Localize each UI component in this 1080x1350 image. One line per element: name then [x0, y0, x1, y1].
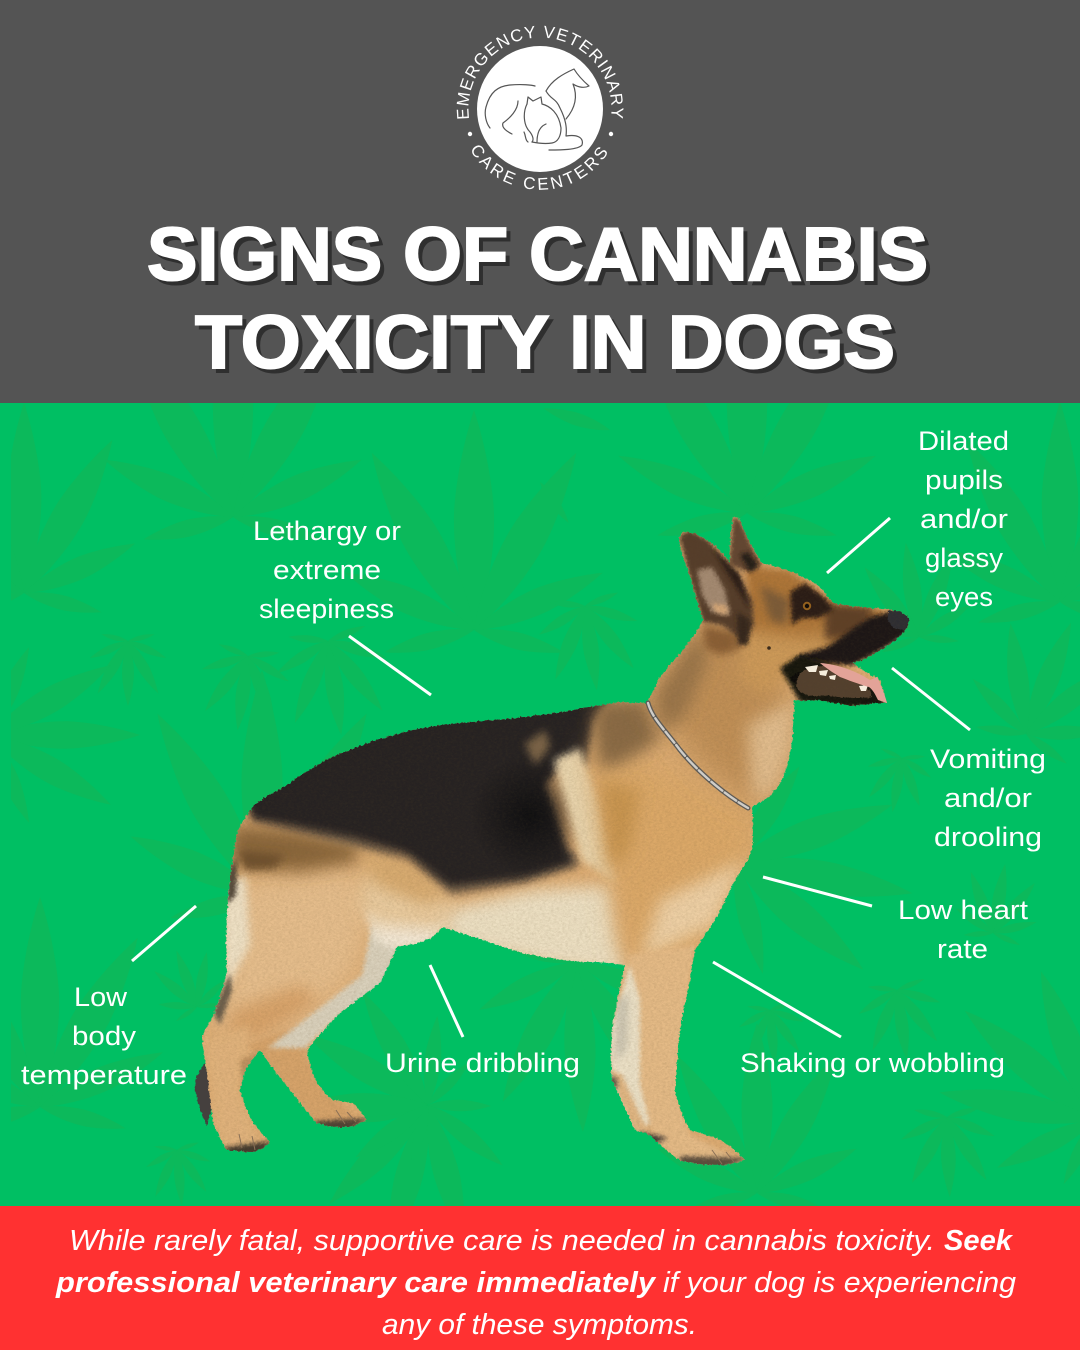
- ear left: [679, 530, 754, 642]
- title: [147, 212, 932, 388]
- head: [742, 564, 890, 667]
- pointer lines: [132, 518, 970, 1037]
- title text: [147, 212, 928, 384]
- footer text: Seek: [944, 1225, 1014, 1257]
- label: dilated pupils: and/or: [920, 504, 1008, 534]
- title text: SIGNS OF CANNABIS: [147, 212, 928, 296]
- label: dilated pupils: pupils: [925, 465, 1003, 495]
- label: urine: Urine dribbling: [385, 1048, 580, 1078]
- fur texture: [202, 546, 885, 1162]
- footer text: [55, 1225, 1016, 1341]
- label: dilated pupils: Dilated: [918, 426, 1009, 456]
- tongue: [820, 663, 887, 703]
- black saddle: [245, 692, 615, 886]
- logo: Emergency Veterinary Care Centers: EMERGENCY VETERINARY: [456, 26, 624, 119]
- body: [190, 510, 920, 1170]
- label: shaking: Shaking or wobbling: [740, 1048, 1005, 1078]
- transition under saddle: [250, 820, 580, 895]
- label: vomiting: and/or: [944, 783, 1032, 813]
- label: low heart rate: Low heart: [898, 895, 1029, 925]
- label: dilated pupils: glassy: [925, 543, 1004, 573]
- title shadow: SIGNS OF CANNABIS: [151, 216, 932, 300]
- paw toes: [239, 1110, 734, 1164]
- hind leg: [215, 865, 375, 1045]
- label: dilated pupils: eyes: [935, 582, 993, 612]
- footer text: if your dog is experiencing: [663, 1267, 1016, 1299]
- title shadow: [151, 216, 932, 388]
- line: pupils: [827, 518, 890, 573]
- green panel: [0, 403, 1080, 1206]
- header panel: [0, 0, 1080, 403]
- label: lethargy: [253, 516, 401, 624]
- label: low body temperature: [21, 982, 187, 1090]
- collar chain: [648, 703, 748, 808]
- mouth: [780, 655, 885, 708]
- label: lethargy: extreme: [273, 555, 381, 585]
- title shadow: TOXICITY IN DOGS: [199, 304, 899, 388]
- label: low body temperature: Low: [74, 982, 128, 1012]
- belly: [440, 885, 625, 975]
- label: lethargy: sleepiness: [259, 594, 394, 624]
- line: vomiting: [892, 668, 970, 730]
- eye patch: [790, 583, 833, 625]
- label: low heart rate: rate: [937, 934, 988, 964]
- rump band: [230, 825, 360, 872]
- footer text: professional veterinary care immediately: [55, 1267, 657, 1299]
- line: body temperature: [132, 906, 196, 961]
- dog illustration: [190, 510, 920, 1170]
- background cannabis leaves: [11, 403, 1080, 1206]
- title text: TOXICITY IN DOGS: [195, 300, 895, 384]
- label: low body temperature: temperature: [21, 1060, 187, 1090]
- label: low body temperature: body: [72, 1021, 137, 1051]
- paw shadows: [225, 1141, 272, 1157]
- footer text: While rarely fatal, supportive care is needed in cannabis toxicity.: [69, 1225, 935, 1257]
- line: shaking: [713, 962, 841, 1037]
- line: lethargy: [349, 636, 431, 695]
- neck: [650, 620, 790, 805]
- label: vomiting: drooling: [934, 822, 1042, 852]
- teeth: [805, 665, 868, 691]
- logo: Emergency Veterinary Care Centers: CARE CENTERS: [472, 145, 607, 190]
- line: heart rate: [763, 877, 872, 906]
- shoulder stripe and chest: [554, 748, 618, 885]
- footer text: any of these symptoms.: [382, 1309, 697, 1341]
- label: vomiting: [930, 744, 1046, 852]
- front leg: [628, 945, 745, 1170]
- eye: [803, 602, 811, 610]
- logo: Emergency Veterinary Care Centers: [456, 26, 624, 190]
- muzzle: [785, 610, 912, 672]
- footer panel: [0, 1206, 1080, 1350]
- tail: [195, 1063, 213, 1126]
- ear right: [729, 517, 762, 572]
- line: urine: [430, 965, 463, 1037]
- label: dilated pupils: [918, 426, 1009, 612]
- label: vomiting: Vomiting: [930, 744, 1046, 774]
- label: lethargy: Lethargy or: [253, 516, 401, 546]
- mole: [767, 646, 771, 650]
- label: low heart rate: [898, 895, 1029, 964]
